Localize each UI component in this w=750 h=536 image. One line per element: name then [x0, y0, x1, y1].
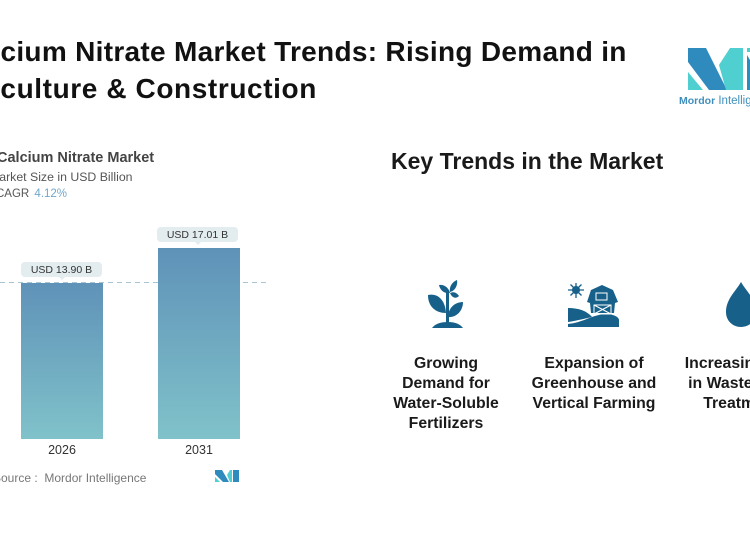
label: Water-Soluble [393, 395, 499, 412]
logo: Mordor Intelligence [679, 48, 750, 107]
icon: water drop [726, 282, 750, 327]
value label 2026: USD 13.90 B [31, 264, 92, 276]
label [393, 355, 499, 432]
bar 2026 [21, 283, 103, 439]
label [532, 355, 656, 412]
icon: barn and sun [568, 283, 619, 327]
small logo [215, 470, 239, 482]
label: Demand for [402, 375, 490, 392]
label: Growing [414, 355, 478, 372]
bar 2031 [158, 248, 240, 439]
panel: market size chart [0, 150, 266, 485]
title [0, 36, 627, 104]
label [685, 355, 750, 408]
chart title: Calcium Nitrate Market [0, 150, 154, 166]
value label 2031: USD 17.01 B [167, 229, 228, 241]
icon: plant [428, 280, 463, 328]
trend: fertilizers [393, 280, 499, 432]
trend: wastewater [685, 282, 750, 408]
heading: key trends: Key Trends in the Market [391, 148, 663, 174]
value label 2026 [21, 262, 102, 277]
label: Vertical Farming [533, 395, 655, 412]
label: Expansion of [544, 355, 644, 372]
dashed reference line [0, 282, 270, 283]
year 2031: 2031 [185, 443, 213, 457]
label: Fertilizers [409, 415, 483, 432]
label: Greenhouse and [532, 375, 656, 392]
value label 2031 [157, 227, 238, 242]
year 2026: 2026 [48, 443, 76, 457]
trend: greenhouse [532, 283, 656, 412]
